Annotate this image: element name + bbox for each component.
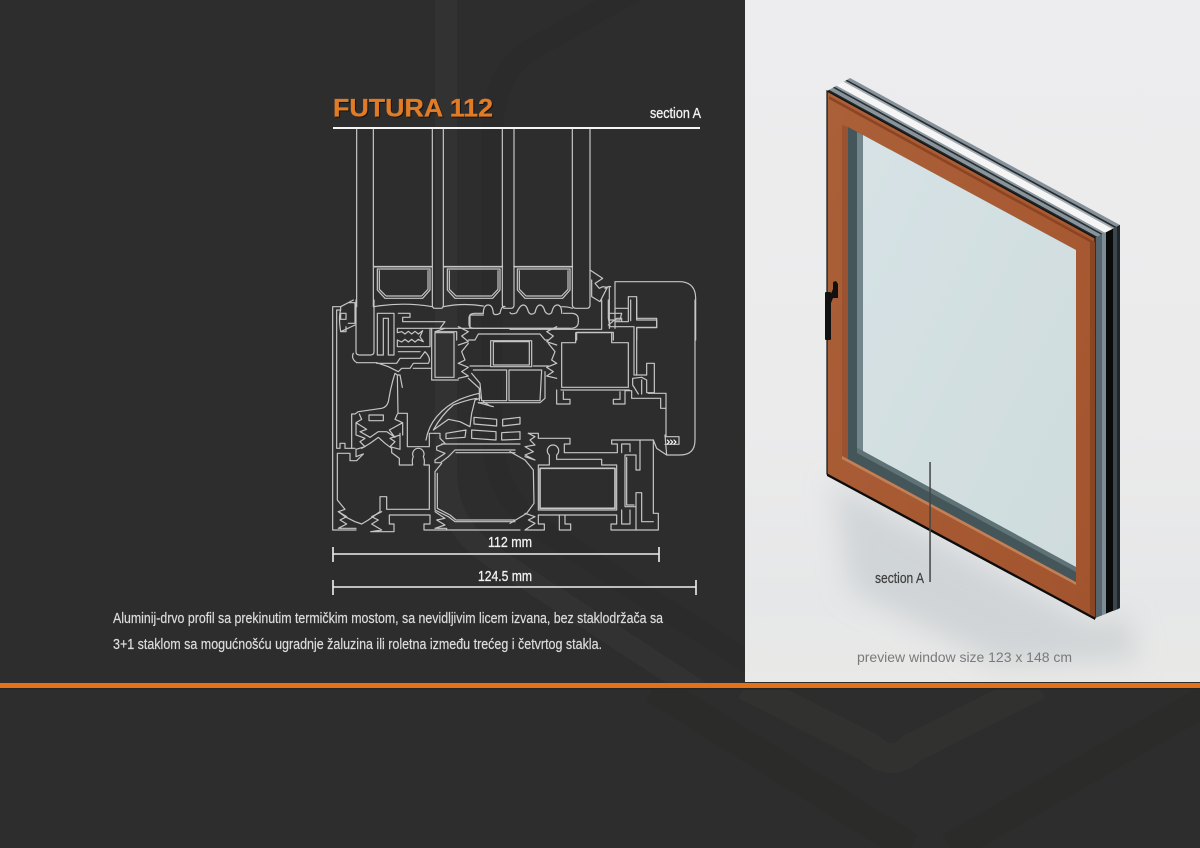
caption: preview window size: preview window size 123 x 148 cm (857, 649, 1072, 665)
label: section A: section A (650, 105, 701, 122)
dimension: 124.5 mm: 124.5 mm (478, 569, 532, 585)
window top edge layers (827, 78, 1120, 238)
door handle (825, 281, 838, 340)
decorative background bands, upper panel (446, 0, 760, 705)
glazing and spacers (357, 129, 696, 340)
dimension: 112 mm: 112 mm (488, 535, 532, 551)
decorative background bands, lower panel (654, 685, 1200, 848)
left reveal highlight (857, 132, 863, 451)
left half of profile (333, 300, 520, 532)
wood frame (827, 91, 1095, 618)
right half of profile (510, 300, 695, 530)
dimension: 124.5 mm (333, 569, 696, 595)
window side edge layers (1095, 225, 1120, 618)
description text: Aluminij-drvo profil sa prekinutim termičkim mostom, sa nevidljivim licem izvana, bez staklodržača sa (113, 611, 664, 627)
cross-section technical drawing (333, 129, 696, 532)
dark line below stripe (0, 688, 1200, 690)
label: section A on window: section A (875, 570, 924, 587)
panel: product image background (745, 0, 1200, 682)
orange divider stripe (0, 683, 1200, 688)
glass pane (863, 135, 1076, 567)
description text (113, 611, 664, 653)
window floor shadow (832, 480, 1140, 665)
wood frame shading (827, 96, 1095, 620)
header rule (333, 127, 700, 129)
bottom reveal highlight (857, 448, 1076, 572)
section A indicator line (929, 462, 931, 582)
dimension: 112 mm (333, 535, 659, 562)
title: FUTURA 112: FUTURA 112 (333, 94, 493, 122)
description text: 3+1 staklom sa mogućnošću ugradnje žaluzina ili roletna između trećeg i četvrtog stakla. (113, 637, 602, 653)
window reveal (848, 127, 1076, 582)
window 3D render (825, 78, 1120, 620)
central sash chambers (440, 315, 570, 407)
